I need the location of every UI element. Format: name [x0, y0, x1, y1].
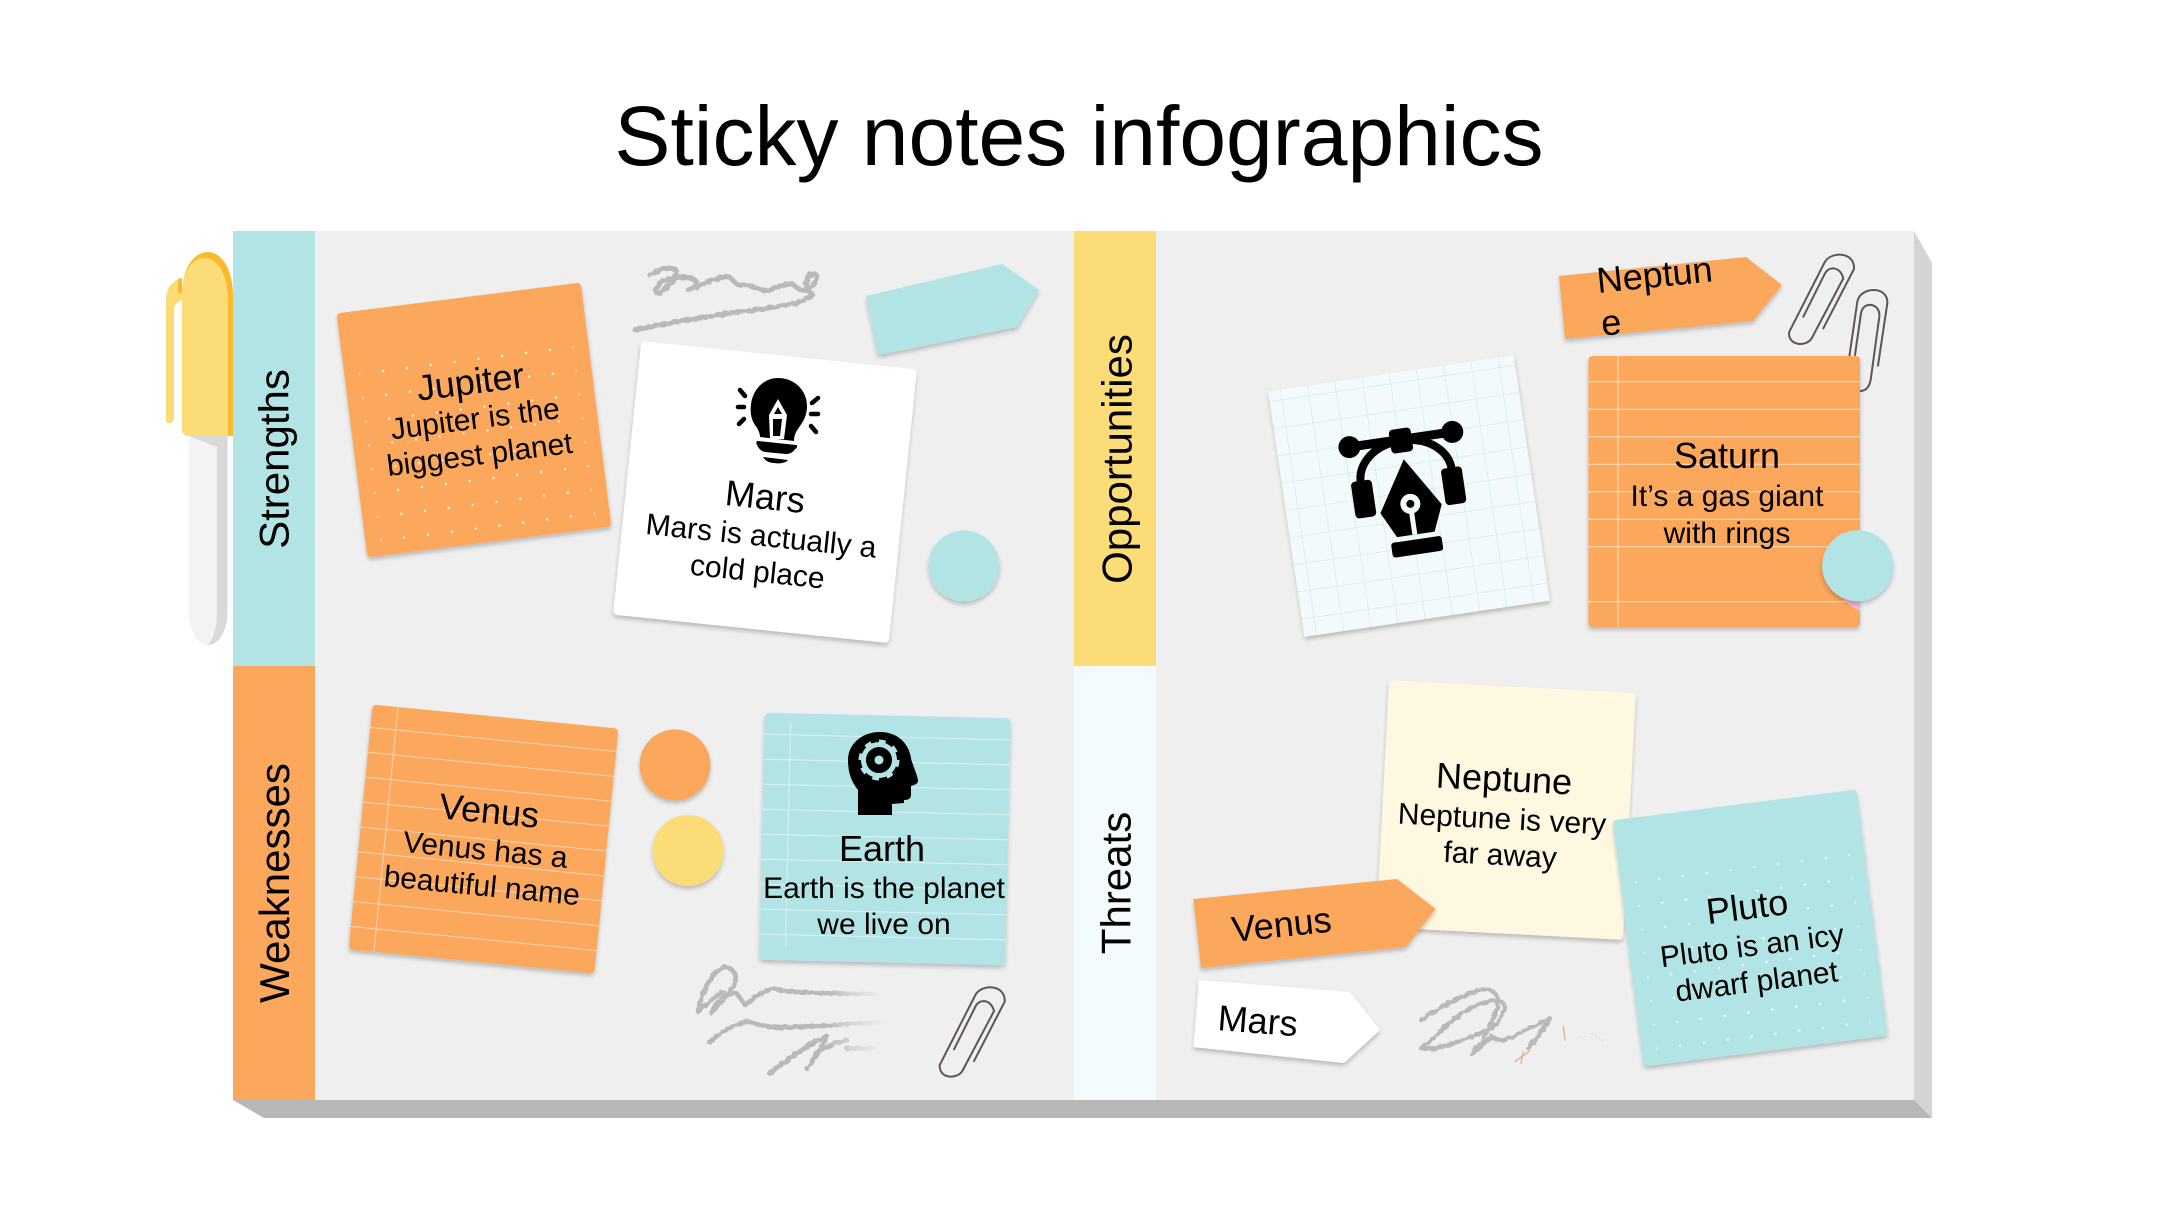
note: Saturn: with rings — [1663, 517, 1790, 550]
note: Pluto: Pluto — [1704, 881, 1790, 932]
panel: threats tab — [1074, 666, 1156, 1100]
note: Pluto: dwarf planet — [1673, 955, 1840, 1009]
note: Saturn — [1588, 356, 1860, 627]
tag: Neptune — [1559, 248, 1782, 344]
circle: pink peek — [1843, 595, 1860, 611]
note: grid with pen tool — [1268, 355, 1550, 637]
note: Venus: Venus has a — [402, 826, 569, 875]
panel: opportunities tab — [1074, 231, 1156, 666]
tag: Mars — [1193, 980, 1380, 1063]
tag: teal blank — [866, 264, 1039, 355]
icon: pen — [166, 252, 233, 645]
icon: head with gear — [848, 732, 918, 815]
note: Saturn: Saturn — [1674, 435, 1780, 476]
scribble: top left — [635, 268, 817, 330]
note: Saturn: It’s a gas giant — [1631, 480, 1824, 513]
board — [233, 231, 1932, 1118]
panel: opportunities tab: Opportunities — [1094, 334, 1140, 584]
note: Venus — [349, 705, 618, 973]
panel: weaknesses tab: Weaknesses — [251, 763, 298, 1003]
note: Earth: Earth — [839, 828, 925, 869]
note: Mars — [613, 341, 917, 643]
scribble: bottom right — [1421, 989, 1605, 1063]
note: Earth — [759, 713, 1011, 965]
note: Earth: Earth is the planet — [763, 872, 1006, 905]
circle: teal — [928, 530, 1000, 602]
note: Mars: Mars — [723, 472, 807, 521]
circle: teal on Saturn — [1822, 530, 1893, 601]
note: Jupiter: biggest planet — [385, 427, 575, 483]
icon: pen tool — [1337, 419, 1480, 563]
note: Neptune: Neptune is very — [1397, 798, 1607, 841]
circle: orange — [640, 730, 710, 800]
icon: paperclip top right 2 — [1849, 290, 1887, 391]
panel: strengths tab: Strengths — [250, 369, 298, 549]
panel: weaknesses tab — [233, 666, 315, 1100]
icon: light bulb — [738, 378, 818, 463]
tag: Neptune: Neptun — [1595, 248, 1714, 301]
icon: paperclip top right 1 — [1789, 255, 1854, 344]
note: Earth: we live on — [816, 908, 951, 941]
tag: Mars: Mars — [1216, 997, 1299, 1044]
note: Venus: beautiful name — [382, 860, 581, 912]
note: Mars: Mars is actually a — [644, 508, 878, 565]
tag: Venus — [1193, 879, 1436, 968]
note: Neptune: Neptune — [1435, 754, 1573, 803]
title: Sticky notes infographics — [614, 89, 1544, 183]
tag: Venus: Venus — [1230, 899, 1333, 950]
scribble: bottom left — [698, 967, 885, 1073]
note: Pluto — [1612, 790, 1888, 1066]
panel: threats tab: Threats — [1092, 812, 1140, 954]
panel: strengths tab — [233, 231, 315, 666]
icon: paperclip bottom left — [940, 987, 1005, 1077]
note: Venus: Venus — [437, 785, 541, 836]
note: Neptune — [1376, 680, 1636, 940]
note: Jupiter — [337, 283, 611, 557]
note: Jupiter: Jupiter — [414, 354, 527, 409]
note: Neptune: far away — [1443, 836, 1558, 875]
circle: yellow — [652, 815, 724, 886]
note: Mars: cold place — [688, 549, 826, 596]
note: Pluto: Pluto is an icy — [1658, 918, 1846, 974]
note: Jupiter: Jupiter is the — [389, 392, 562, 446]
tag: Neptune: e — [1599, 301, 1623, 344]
